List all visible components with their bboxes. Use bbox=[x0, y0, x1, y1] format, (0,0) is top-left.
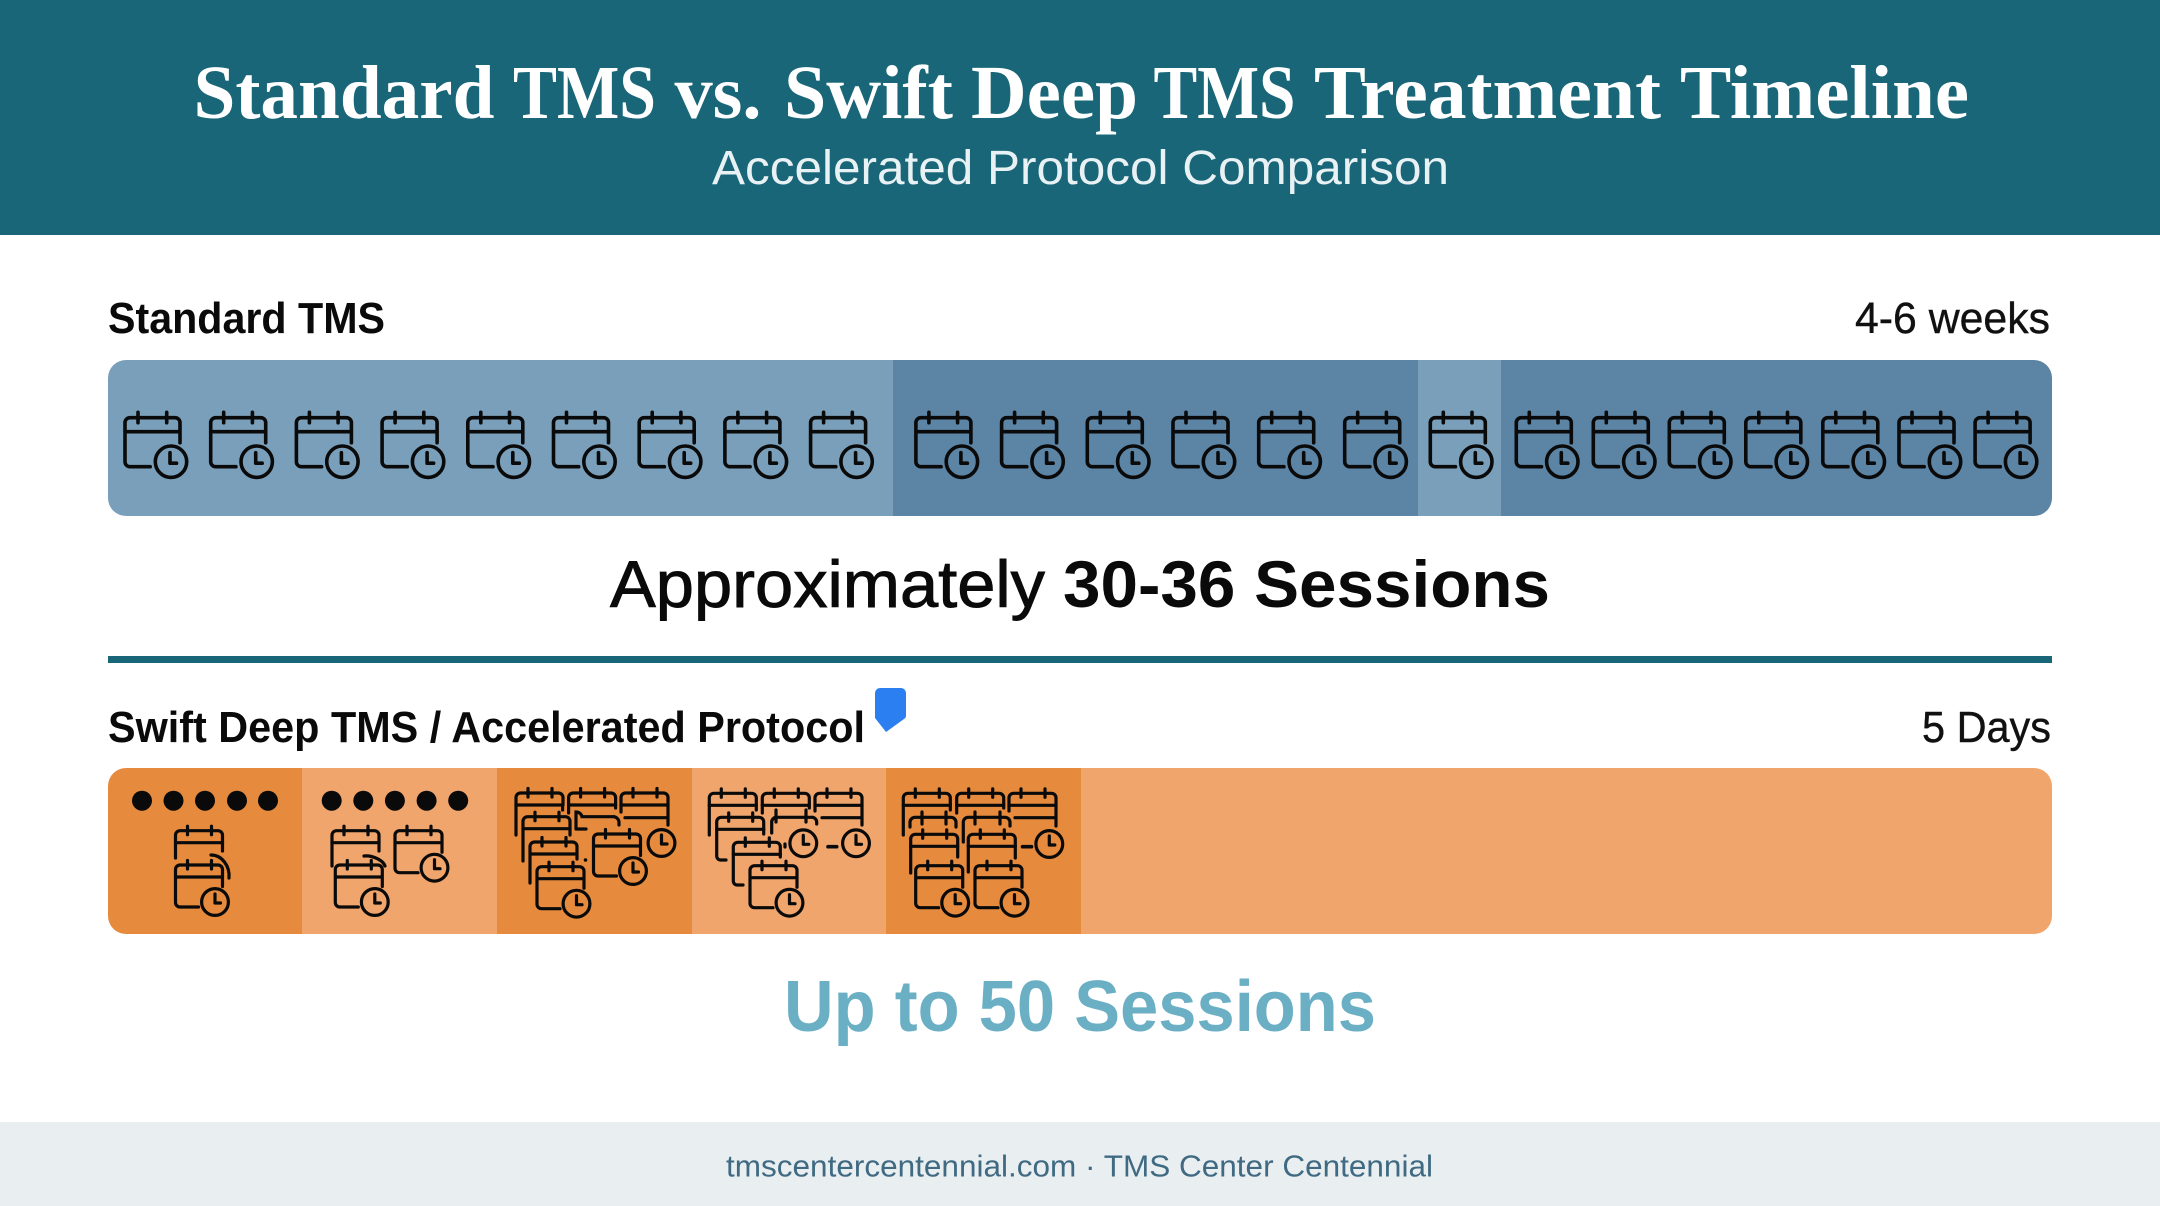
footer bbox=[0, 1122, 2160, 1206]
title: Treatment bbox=[1314, 51, 1661, 135]
title: TMS bbox=[1154, 51, 1296, 135]
heading: Standard TMS: Standard TMS bbox=[108, 294, 385, 343]
title bbox=[194, 51, 1969, 135]
day 2 sessions bbox=[322, 791, 468, 915]
subtitle: Accelerated Protocol Comparison bbox=[712, 142, 1449, 195]
footer text: tmscentercentennial.com · TMS Center Centennial bbox=[726, 1148, 1433, 1184]
header banner bbox=[0, 0, 2160, 235]
title: vs. bbox=[674, 51, 762, 135]
duration: 4-6 weeks: 4-6 weeks bbox=[1855, 294, 2050, 343]
icon: blue speech marker bbox=[875, 688, 906, 732]
day 1 sessions bbox=[132, 791, 278, 915]
title: Timeline bbox=[1680, 51, 1969, 135]
session count: standard bbox=[610, 547, 1550, 621]
session count: standard: Approximately bbox=[610, 547, 1045, 621]
day 5 sessions bbox=[903, 789, 1063, 916]
title: Deep bbox=[971, 51, 1138, 135]
title: Swift bbox=[784, 51, 953, 135]
timeline bar: swift bbox=[108, 768, 2052, 934]
title: Standard bbox=[194, 51, 494, 135]
duration: 5 days: 5 Days bbox=[1922, 703, 2051, 752]
session count: swift: Up to 50 Sessions bbox=[784, 967, 1376, 1047]
day 4 sessions bbox=[709, 789, 869, 916]
panel: swift deep TMS bbox=[108, 688, 2052, 1047]
panel: standard TMS bbox=[108, 294, 2052, 621]
heading: Swift Deep TMS: Swift Deep TMS / Accelerated Protocol bbox=[108, 703, 865, 752]
timeline bar: standard bbox=[108, 360, 2052, 516]
session count: standard: 30-36 Sessions bbox=[1063, 547, 1550, 621]
session icons: standard bbox=[125, 412, 2037, 477]
title: TMS bbox=[513, 51, 656, 135]
day 3 sessions bbox=[516, 788, 675, 917]
